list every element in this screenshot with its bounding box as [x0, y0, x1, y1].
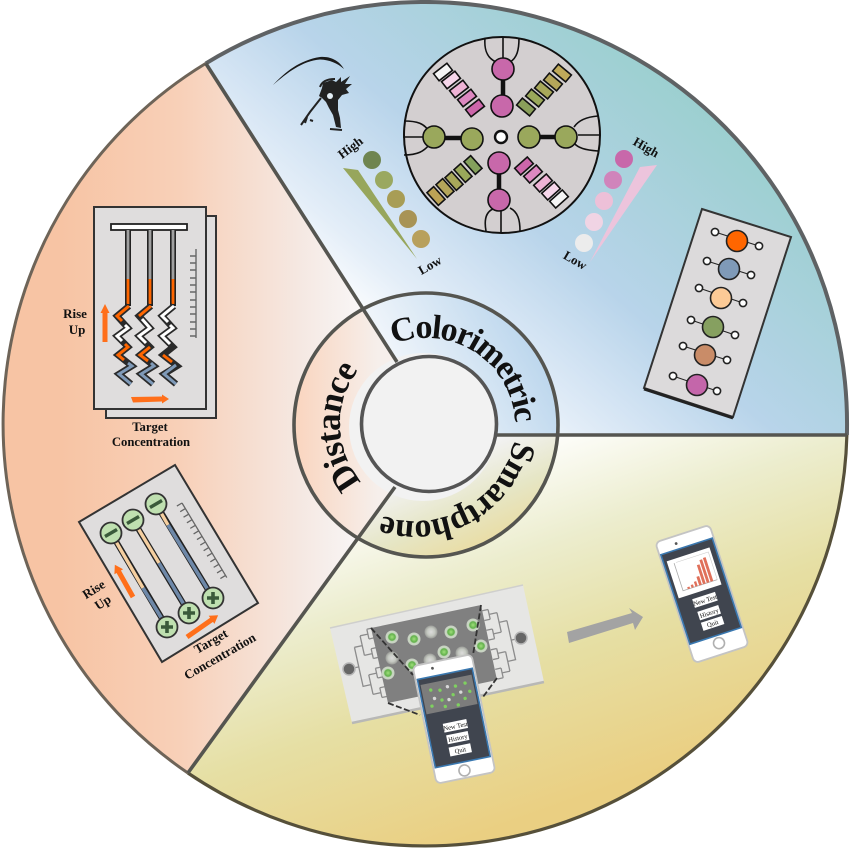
arrow: target concentration — [184, 611, 221, 641]
app menu: New Test — [693, 594, 718, 608]
olive reservoirs — [423, 126, 577, 150]
detection strip: lower right — [515, 157, 568, 208]
app menu: Quit — [454, 746, 467, 755]
panel: colorimetric sector — [206, 2, 847, 435]
chip: straight channel distance device — [79, 465, 259, 683]
connection pads — [343, 632, 527, 675]
label: smartphone: Smartphone — [380, 442, 534, 540]
label: up: Up — [92, 591, 114, 613]
label: concentration: Concentration — [181, 629, 259, 683]
connecting bars — [440, 75, 560, 195]
straight channels — [125, 230, 176, 306]
arrow: target concentration — [131, 394, 169, 404]
label: target concentration: Target — [132, 420, 169, 434]
magenta reservoirs — [488, 58, 514, 211]
magnified area — [371, 605, 497, 703]
ruler — [190, 249, 196, 338]
dashed zoom lines — [371, 605, 497, 715]
center inlet — [495, 131, 507, 143]
label: rise up: Rise — [80, 576, 108, 602]
label: rise up: Rise — [63, 306, 87, 321]
detection strip: upper right — [517, 64, 571, 116]
icon: observing eye — [273, 57, 352, 130]
wells — [382, 618, 488, 680]
bottom wells — [156, 588, 224, 638]
fractal channels — [347, 605, 523, 702]
chip: circular colorimetric device — [403, 37, 600, 233]
pink colour scale: Low — [561, 247, 590, 273]
pink colour scale: High — [631, 134, 663, 161]
label: distance: Distance — [321, 364, 361, 494]
arrow: rise up — [100, 304, 110, 342]
icon: phone showing bar chart — [655, 525, 749, 663]
olive colour scale — [335, 133, 445, 278]
olive colour scale: Low — [415, 252, 445, 278]
channels — [111, 504, 213, 627]
chip: rectangular multi-colour strip — [644, 209, 791, 418]
app menu — [692, 592, 726, 631]
pink colour scale — [561, 134, 663, 273]
label: colorimetric: Colorimetric — [392, 314, 536, 422]
arrow: rise up — [110, 562, 137, 599]
olive colour scale: High — [335, 133, 366, 162]
app menu: New Test — [443, 721, 468, 733]
chip: serpentine distance device — [94, 207, 216, 418]
app menu: History — [699, 607, 721, 620]
serpentine channels — [117, 306, 177, 384]
bar chart — [667, 547, 722, 598]
ruler — [177, 503, 227, 581]
label: target: Target — [191, 625, 231, 657]
top wells — [100, 494, 166, 544]
app menu: Quit — [706, 619, 720, 629]
icon: phone imaging the chip — [413, 654, 495, 784]
arrow: chip to result — [567, 608, 643, 643]
label: rise up: Up — [69, 322, 85, 337]
microchannels — [403, 37, 600, 233]
panel: smartphone sector — [188, 435, 847, 846]
chip: microfluidic well plate — [330, 585, 544, 723]
detection strip: upper left — [434, 63, 484, 117]
app menu — [442, 719, 473, 757]
hub — [362, 356, 496, 492]
detection strip: lower left — [427, 156, 482, 205]
panel: distance sector — [3, 63, 397, 773]
label: target concentration: Concentration — [112, 435, 190, 449]
app menu: History — [448, 733, 469, 744]
